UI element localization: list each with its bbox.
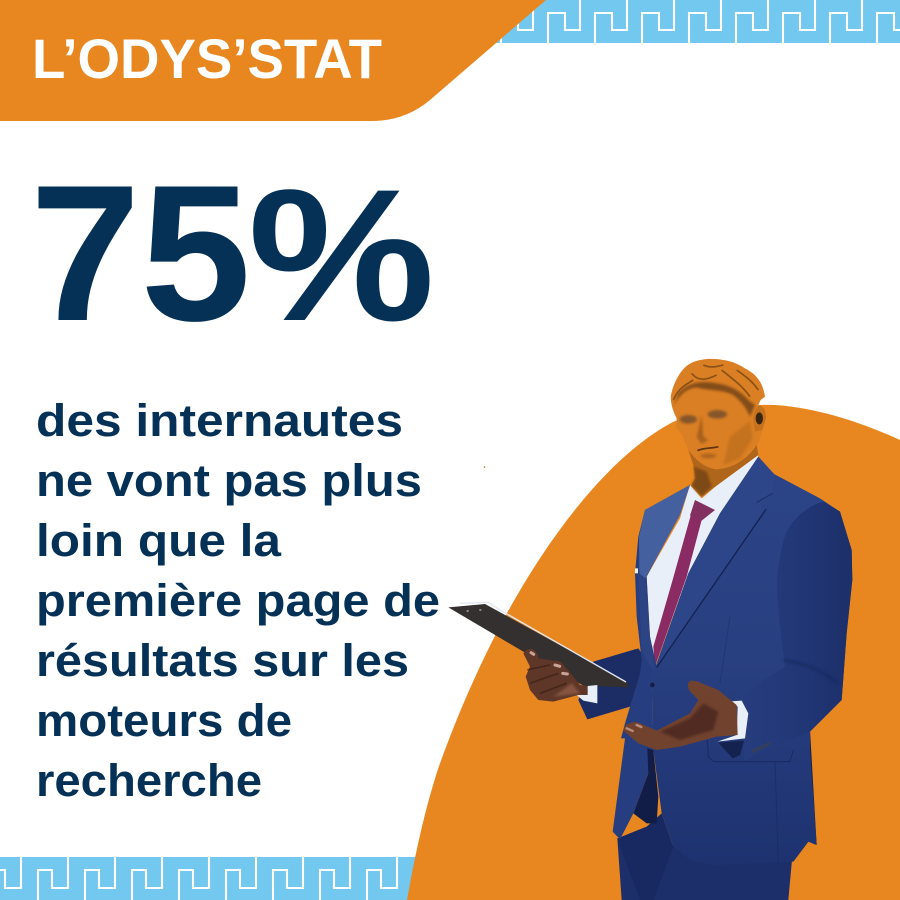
ear bbox=[753, 406, 766, 432]
jacket bbox=[613, 457, 852, 865]
neck bbox=[688, 445, 758, 497]
description text: recherche bbox=[36, 755, 262, 806]
left lapel bbox=[639, 485, 690, 578]
ear inner bbox=[756, 412, 763, 424]
hair strands bbox=[673, 365, 758, 400]
lapel crease bbox=[657, 509, 766, 667]
left eye socket bbox=[680, 415, 697, 424]
description text: loin que la bbox=[36, 515, 282, 566]
jacket seam dart bbox=[720, 617, 730, 683]
big statistic: 75 bbox=[30, 145, 251, 362]
tie knot bbox=[690, 500, 715, 521]
statue head bbox=[671, 359, 766, 497]
hair fringe shadow bbox=[673, 382, 755, 417]
bottom meander band bbox=[0, 857, 420, 900]
inner jacket strip bbox=[638, 573, 655, 672]
clipboard rivets bbox=[467, 610, 481, 611]
cuff shadow triangle bbox=[718, 741, 744, 758]
clipboard board bbox=[448, 604, 629, 687]
left shirt cuff bbox=[577, 685, 597, 703]
left hand bbox=[523, 649, 588, 702]
description text: ne vont pas plus bbox=[36, 455, 422, 506]
neck dark side bbox=[692, 467, 712, 496]
description text: résultats sur les bbox=[36, 635, 409, 686]
cheek shadow bbox=[723, 422, 753, 465]
pocket flap outline bbox=[707, 740, 793, 762]
big statistic bbox=[30, 145, 435, 362]
sleeve buttons bbox=[752, 743, 770, 752]
right palm shade bbox=[660, 703, 718, 740]
header title: L’ODYS’STAT bbox=[32, 27, 382, 90]
right hand bbox=[623, 681, 738, 750]
shirt bbox=[647, 452, 758, 667]
figure: statue-headed businessman bbox=[448, 359, 852, 900]
description text: des internautes bbox=[36, 395, 403, 446]
jacket rear vent bbox=[793, 730, 817, 862]
header banner bbox=[0, 0, 546, 121]
description text bbox=[36, 395, 440, 806]
necktie bbox=[653, 500, 715, 667]
pocket square bbox=[635, 568, 638, 573]
stray orange dot bbox=[484, 466, 485, 468]
chin shadow bbox=[700, 454, 716, 458]
right shirt cuff bbox=[717, 701, 748, 742]
trousers bbox=[617, 838, 792, 900]
left hand knuckle highlights bbox=[527, 665, 567, 693]
head silhouette bbox=[671, 359, 766, 497]
lapel notch bbox=[757, 493, 773, 502]
jacket right front bbox=[652, 457, 852, 865]
right eye socket bbox=[708, 410, 727, 419]
nose shadow bbox=[697, 415, 708, 444]
jacket button bbox=[650, 683, 655, 687]
right lapel bbox=[655, 457, 774, 668]
far sleeve bbox=[578, 648, 653, 719]
mouth bbox=[697, 447, 718, 451]
sleeve elbow fold bbox=[783, 660, 837, 683]
arm sleeve bbox=[733, 502, 852, 761]
description text: moteurs de bbox=[36, 695, 292, 746]
clipboard paper edge bbox=[460, 602, 626, 682]
clipboard bbox=[448, 602, 629, 687]
orange background shape bbox=[407, 405, 900, 900]
jacket left front bbox=[613, 485, 690, 839]
right hand fingertips bbox=[627, 725, 641, 731]
hem seam bbox=[775, 762, 778, 863]
tie blade bbox=[653, 516, 702, 667]
top meander band bbox=[470, 0, 900, 43]
left hand fingernails bbox=[531, 653, 567, 674]
left hand shape bbox=[523, 649, 588, 702]
left hand lighter back bbox=[553, 683, 580, 697]
gap between jacket fronts bbox=[633, 748, 658, 823]
trouser shadow bbox=[617, 813, 673, 900]
right hand shape bbox=[623, 681, 738, 750]
big statistic: % bbox=[248, 150, 435, 360]
description text: première page de bbox=[36, 575, 440, 626]
